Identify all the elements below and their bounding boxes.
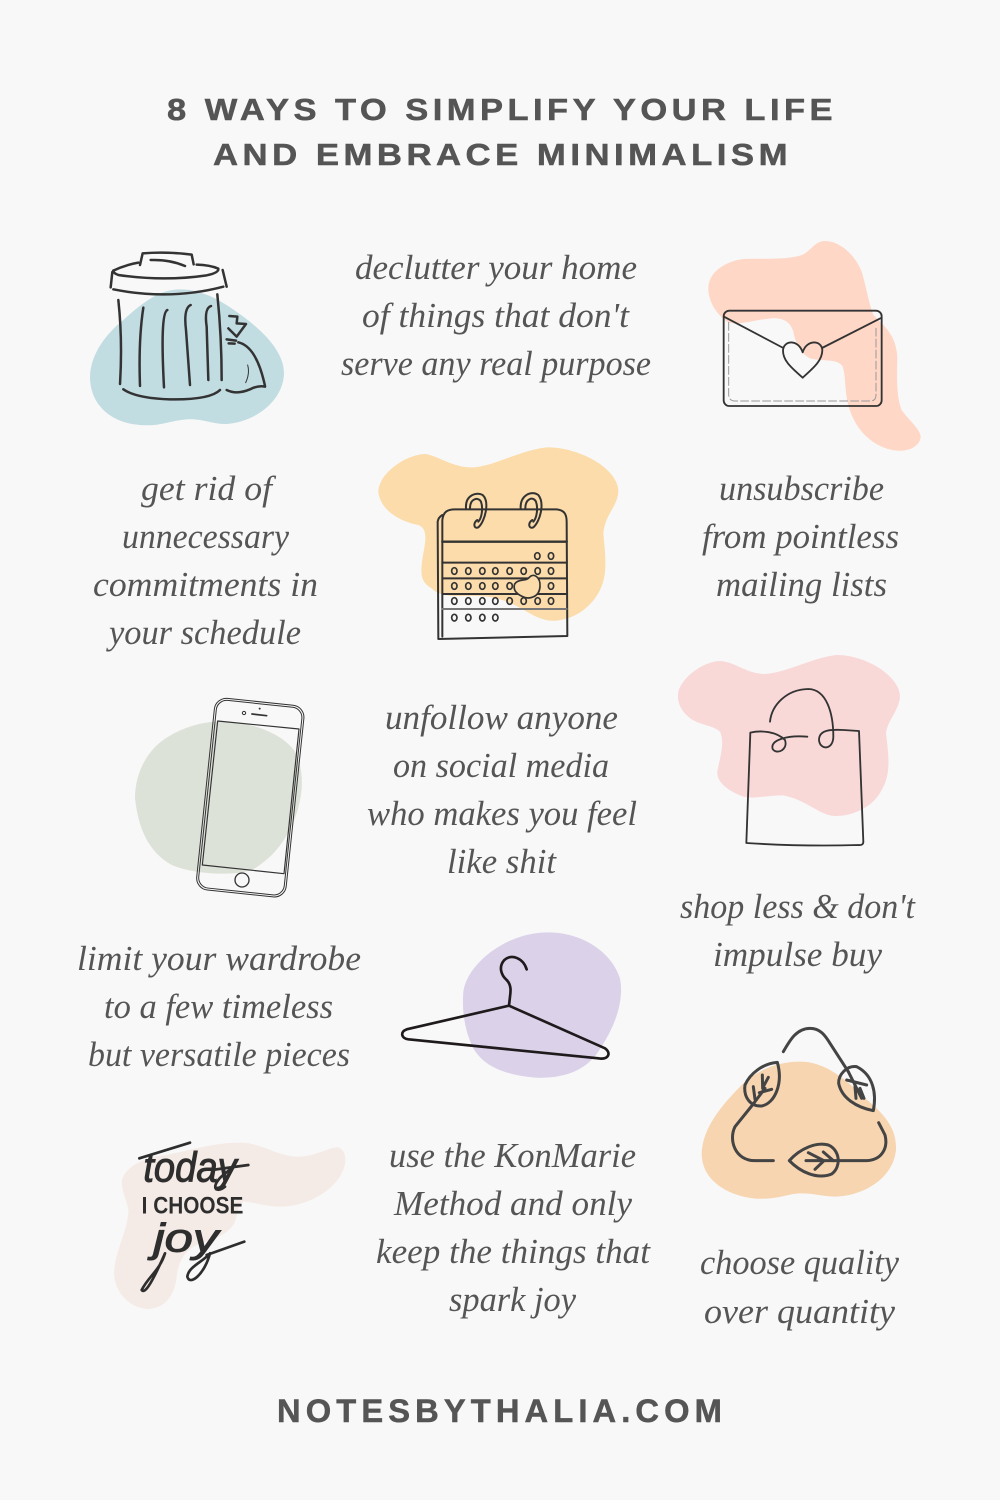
text: unfollow: unfollow anyone bbox=[385, 698, 618, 737]
icon: today I choose joy lettering on blush blob: joy bbox=[147, 1217, 221, 1261]
text: unsubscribe: from pointless bbox=[702, 517, 899, 556]
text: unfollow: like shit bbox=[447, 842, 557, 881]
icon: today I choose joy lettering on blush blob: I CHOOSE bbox=[142, 1192, 243, 1219]
title: 8 WAYS TO SIMPLIFY YOUR LIFE bbox=[167, 92, 837, 127]
text: unfollow bbox=[367, 698, 637, 881]
text: limit your wardrobe bbox=[77, 939, 361, 1074]
icon: envelope on peach blob bbox=[708, 241, 921, 451]
text: get rid of commitments bbox=[93, 469, 318, 652]
text: KonMarie: spark joy bbox=[449, 1280, 576, 1319]
text: KonMarie: Method and only bbox=[393, 1184, 632, 1223]
icon: shopping bag on pink blob bbox=[678, 655, 900, 846]
title bbox=[167, 92, 837, 172]
text: choose quality: over quantity bbox=[704, 1292, 895, 1331]
title: AND EMBRACE MINIMALISM bbox=[213, 137, 792, 172]
text: KonMarie: keep the things that bbox=[376, 1232, 651, 1271]
text: limit your wardrobe: to a few timeless bbox=[104, 987, 333, 1026]
text: choose quality: choose quality bbox=[700, 1243, 899, 1282]
text: get rid of commitments: your schedule bbox=[106, 613, 301, 652]
text: choose quality bbox=[700, 1243, 899, 1331]
text: KonMarie bbox=[376, 1136, 651, 1319]
icon: today I choose joy lettering on blush blob: today bbox=[143, 1144, 239, 1191]
text: declutter: declutter your home bbox=[355, 248, 637, 287]
text: get rid of commitments: commitments in bbox=[93, 565, 318, 604]
text: declutter: of things that don't bbox=[362, 296, 630, 335]
text: declutter: serve any real purpose bbox=[341, 344, 651, 383]
text: get rid of commitments: get rid of bbox=[141, 469, 276, 508]
text: KonMarie: use the KonMarie bbox=[389, 1136, 636, 1175]
icon: smartphone on sage blob bbox=[135, 697, 305, 898]
text: unsubscribe: unsubscribe bbox=[719, 469, 884, 508]
text: get rid of commitments: unnecessary bbox=[122, 517, 289, 556]
text: shop less bbox=[680, 887, 916, 974]
text: shop less: shop less & don't bbox=[680, 887, 916, 926]
icon: hanger on lilac blob bbox=[402, 932, 621, 1078]
text: unsubscribe: mailing lists bbox=[716, 565, 887, 604]
footer website: NOTESBYTHALIA.COM bbox=[277, 1393, 727, 1429]
text: unsubscribe bbox=[702, 469, 899, 604]
text: declutter bbox=[341, 248, 651, 383]
icon: today I choose joy lettering on blush blob bbox=[114, 1143, 345, 1309]
icon: calendar on yellow blob bbox=[378, 447, 618, 639]
icon: trash can on teal blob bbox=[90, 253, 284, 425]
text: limit your wardrobe: but versatile pieces bbox=[88, 1035, 350, 1074]
text: unfollow: on social media bbox=[393, 746, 609, 785]
text: shop less: impulse buy bbox=[713, 935, 882, 974]
text: unfollow: who makes you feel bbox=[367, 794, 637, 833]
text: limit your wardrobe: limit your wardrobe bbox=[77, 939, 361, 978]
icon: recycle leaves on apricot blob bbox=[702, 1028, 896, 1199]
